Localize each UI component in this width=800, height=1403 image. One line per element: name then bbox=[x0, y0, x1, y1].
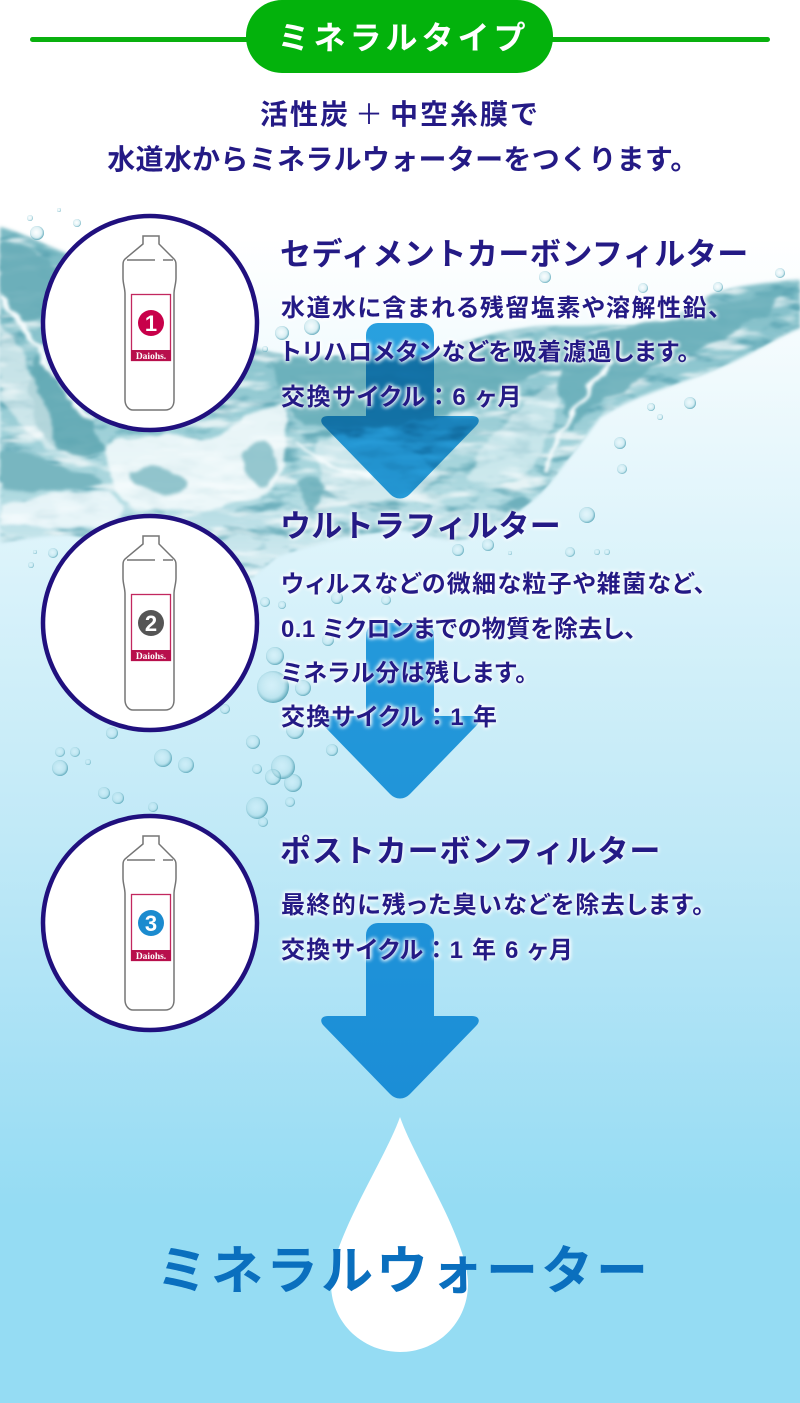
filter 2 cycle: 交換サイクル：1 年 bbox=[281, 704, 498, 731]
filter 3 description: 最終的に残った臭いなどを除去します。 bbox=[281, 892, 705, 919]
bottle 3 circle bbox=[43, 816, 257, 1030]
filter 1 description: 水道水に含まれる残留塩素や溶解性鉛、 bbox=[281, 295, 722, 322]
pill heading: ミネラルタイプ bbox=[277, 20, 530, 56]
filter 2 heading: ウルトラフィルター bbox=[280, 509, 561, 544]
bottle 1 circle bbox=[43, 216, 257, 430]
intro text: 水道水からミネラルウォーターをつくります。 bbox=[107, 144, 699, 175]
bottle 2 circle bbox=[43, 516, 257, 730]
intro text bbox=[107, 99, 699, 175]
filter 3 heading: ポストカーボンフィルター bbox=[280, 834, 661, 869]
bottle 2 circle: Daiohs. bbox=[136, 652, 166, 662]
green rule bbox=[30, 37, 770, 42]
filter 2 description: ウィルスなどの微細な粒子や雑菌など、 bbox=[281, 571, 707, 598]
arrow 1 bbox=[321, 323, 479, 498]
section title band bbox=[30, 0, 770, 73]
filter 1 cycle: 交換サイクル：6 ヶ月 bbox=[281, 384, 523, 411]
bottle 2 circle: 2 bbox=[145, 611, 157, 636]
intro text: 活性炭＋中空糸膜で bbox=[260, 99, 540, 130]
filter 1 heading: セディメントカーボンフィルター bbox=[280, 237, 749, 272]
result label: ミネラルウォーター bbox=[156, 1243, 651, 1301]
pill heading bbox=[246, 0, 553, 73]
bottle 3 circle: Daiohs. bbox=[136, 952, 166, 962]
filter 2 description line 3: ミネラル分は残します。 bbox=[281, 660, 528, 687]
arrow 2 bbox=[321, 623, 479, 798]
arrow 3 bbox=[321, 923, 479, 1098]
bottle 1 circle: Daiohs. bbox=[136, 352, 166, 362]
filter 1 description line 2: トリハロメタンなどを吸着濾過します。 bbox=[281, 339, 690, 366]
filter 2 description line 2: 0.1 ミクロンまでの物質を除去し、 bbox=[281, 616, 637, 643]
bottle 1 circle: 1 bbox=[145, 311, 157, 336]
filter 3 cycle: 交換サイクル：1 年 6 ヶ月 bbox=[281, 937, 574, 964]
bubbles bbox=[27, 208, 785, 827]
bottle 3 circle: 3 bbox=[145, 911, 157, 936]
